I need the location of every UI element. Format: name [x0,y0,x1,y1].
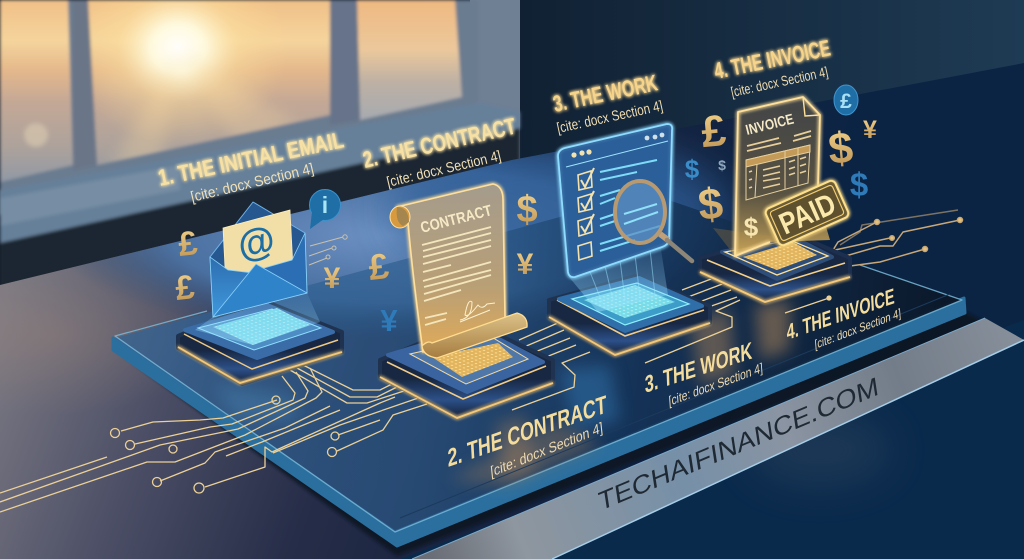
heading: step 4: 4. THE INVOICE [712,35,833,84]
currency symbols around contract: $ [516,189,538,231]
window sill [0,103,520,287]
hologram beam 3 [569,243,668,312]
info bubble: i [322,192,328,218]
currency symbols around invoice: $ [696,179,725,230]
table citation: step 3: [cite: docx Section 4] [668,360,763,409]
heading: step 3: 3. THE WORK [551,69,660,117]
currency symbols around work [685,154,726,184]
envelope icon [210,202,307,317]
contract heading: CONTRACT [419,202,494,237]
currency symbols around email: £ [176,224,199,264]
circuit traces right [825,210,962,268]
paid stamp: PAID [774,188,841,241]
glass platform plate [113,193,985,556]
invoice table [746,145,810,200]
contract text lines [422,227,491,325]
platform 4 [700,232,850,302]
citation: step 4: [cite: docx Section 4] [729,63,829,100]
table label: step 4: 4. THE INVOICE [786,284,895,345]
metal nameplate [412,318,1024,559]
blue pound coin: £ [840,90,852,113]
circuit traces between platforms [512,276,831,410]
currency symbols around invoice: $ [826,123,855,174]
invoice heading: INVOICE [744,111,796,139]
currency symbols around email: ¥ [324,262,341,295]
table citation: step 2: [cite: docx Section 4] [490,420,604,481]
at sign: @ [234,219,279,268]
currency symbols around invoice: ¥ [863,116,877,144]
signature [460,301,495,322]
citation: step 1: [cite: docx Section 4] [189,160,316,206]
contract scroll icon [390,184,527,358]
work checklist window icon [558,124,692,277]
info connector lines [309,235,347,265]
window with sunrise view [0,0,478,215]
table label: step 2: 2. THE CONTRACT [447,391,607,473]
currency symbols around invoice: £ [699,106,729,157]
table label: step 3: 3. THE WORK [644,337,753,398]
scroll bottom roll [422,313,527,358]
circuit traces left [0,365,427,512]
blue pound coin [834,85,858,115]
table citation: step 4: [cite: docx Section 4] [814,306,901,352]
currency symbols around work: $ [718,157,726,173]
magnifying glass [615,181,692,261]
heading: step 2: 2. THE CONTRACT [360,113,518,173]
currency symbols around contract [367,189,538,338]
invoice dollar sign: $ [744,212,759,242]
currency symbols around invoice: $ [850,166,868,203]
platform 3 [549,276,710,355]
currency symbols around invoice [696,106,877,230]
currency symbols around contract: £ [367,245,391,288]
platform 2 [380,322,553,418]
platform 1 [178,300,342,384]
info bubble [310,190,340,229]
citation: step 3: [cite: docx Section 4] [555,98,664,137]
hologram beam 1 [195,293,320,345]
checklist lines [600,160,660,251]
currency symbols around contract: ¥ [380,303,398,338]
citation: step 2: [cite: docx Section 4] [385,148,503,191]
invoice document icon [713,97,830,257]
currency symbols around email [173,224,341,308]
invoice text lines [747,131,811,151]
currency symbols around work: $ [685,154,700,184]
currency symbols around contract: ¥ [517,248,534,281]
checklist boxes [578,168,594,260]
nameplate text: TECHAIFINANCE.COM [597,372,880,517]
currency symbols around email: £ [173,268,196,308]
heading: step 1: 1. THE INITIAL EMAIL [156,126,346,191]
